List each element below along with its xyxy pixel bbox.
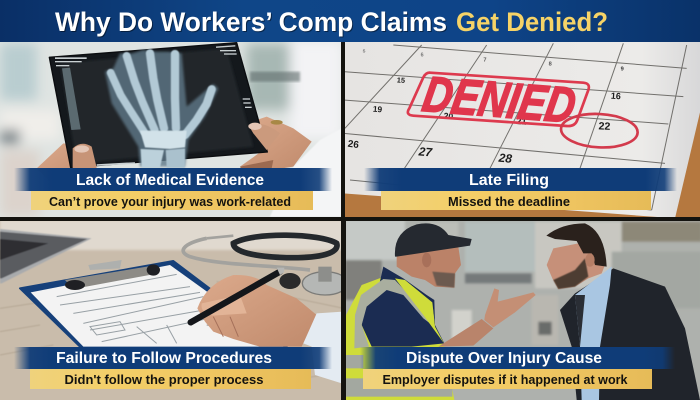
calendar dates: 6 [421,53,424,59]
x-ray film [49,43,267,168]
icon: left holding hand [37,143,96,168]
red circle around 22 [560,112,638,149]
calendar dates: 5 [363,48,366,54]
calendar grid [343,43,687,210]
panel: dispute over injury cause photo [345,220,700,400]
thumbs [73,144,97,169]
denied stamp [406,71,590,128]
icon: hand writing with pen [191,268,342,383]
calendar dates: 22 [598,120,611,133]
calendar dates: 16 [611,91,621,101]
banner: failure to follow procedures: Didn't follow the proper process [64,372,264,387]
panel: failure to follow procedures photo [0,220,348,400]
calendar dates: 27 [417,144,434,160]
x-ray hand flesh [105,50,218,167]
calendar page [343,42,700,218]
calendar dates: 8 [549,62,552,68]
banner: lack of medical evidence: Lack of Medical Evidence [76,172,264,189]
calendar dates: 9 [621,67,624,73]
panel: lack of medical evidence photo [0,40,343,220]
banner: failure to follow procedures [14,347,332,389]
title: Why Do Workers’ Comp Claims [55,7,447,37]
calendar dates: 21 [516,116,527,127]
panel: late filing photo [343,40,700,220]
banner: dispute over injury cause: Employer disputes if it happened at work [382,372,628,387]
calendar dates: 28 [497,151,513,166]
banner: dispute over injury cause: Dispute Over Injury Cause [406,350,602,367]
banner: failure to follow procedures: Failure to Follow Procedures [56,350,272,367]
banner: lack of medical evidence: Can’t prove your injury was work-related [49,194,291,209]
calendar dates: 15 [396,75,405,85]
calendar dates: 7 [483,58,486,64]
title: Get Denied? [456,7,608,37]
calendar dates: 26 [347,139,360,151]
icon: laptop [0,229,92,283]
worker in safety vest and cap [345,223,536,400]
man in dark suit [546,223,700,400]
banner: late filing: Missed the deadline [448,194,570,209]
header bar [0,0,700,42]
title: Why Do Workers’ Comp Claims [56,8,448,38]
icon: right holding hand [240,117,312,170]
banner: late filing: Late Filing [469,172,549,189]
banner: dispute over injury cause [360,347,675,389]
calendar dates: 19 [372,104,383,114]
x-ray bones [111,53,212,135]
banner: lack of medical evidence [14,168,332,210]
icon: stethoscope [183,235,348,295]
icon: clipboard [20,260,287,347]
banner: late filing [364,168,677,210]
calendar dates: 20 [443,111,454,122]
denied stamp: DENIED [419,66,580,133]
calendar dates [347,48,624,166]
